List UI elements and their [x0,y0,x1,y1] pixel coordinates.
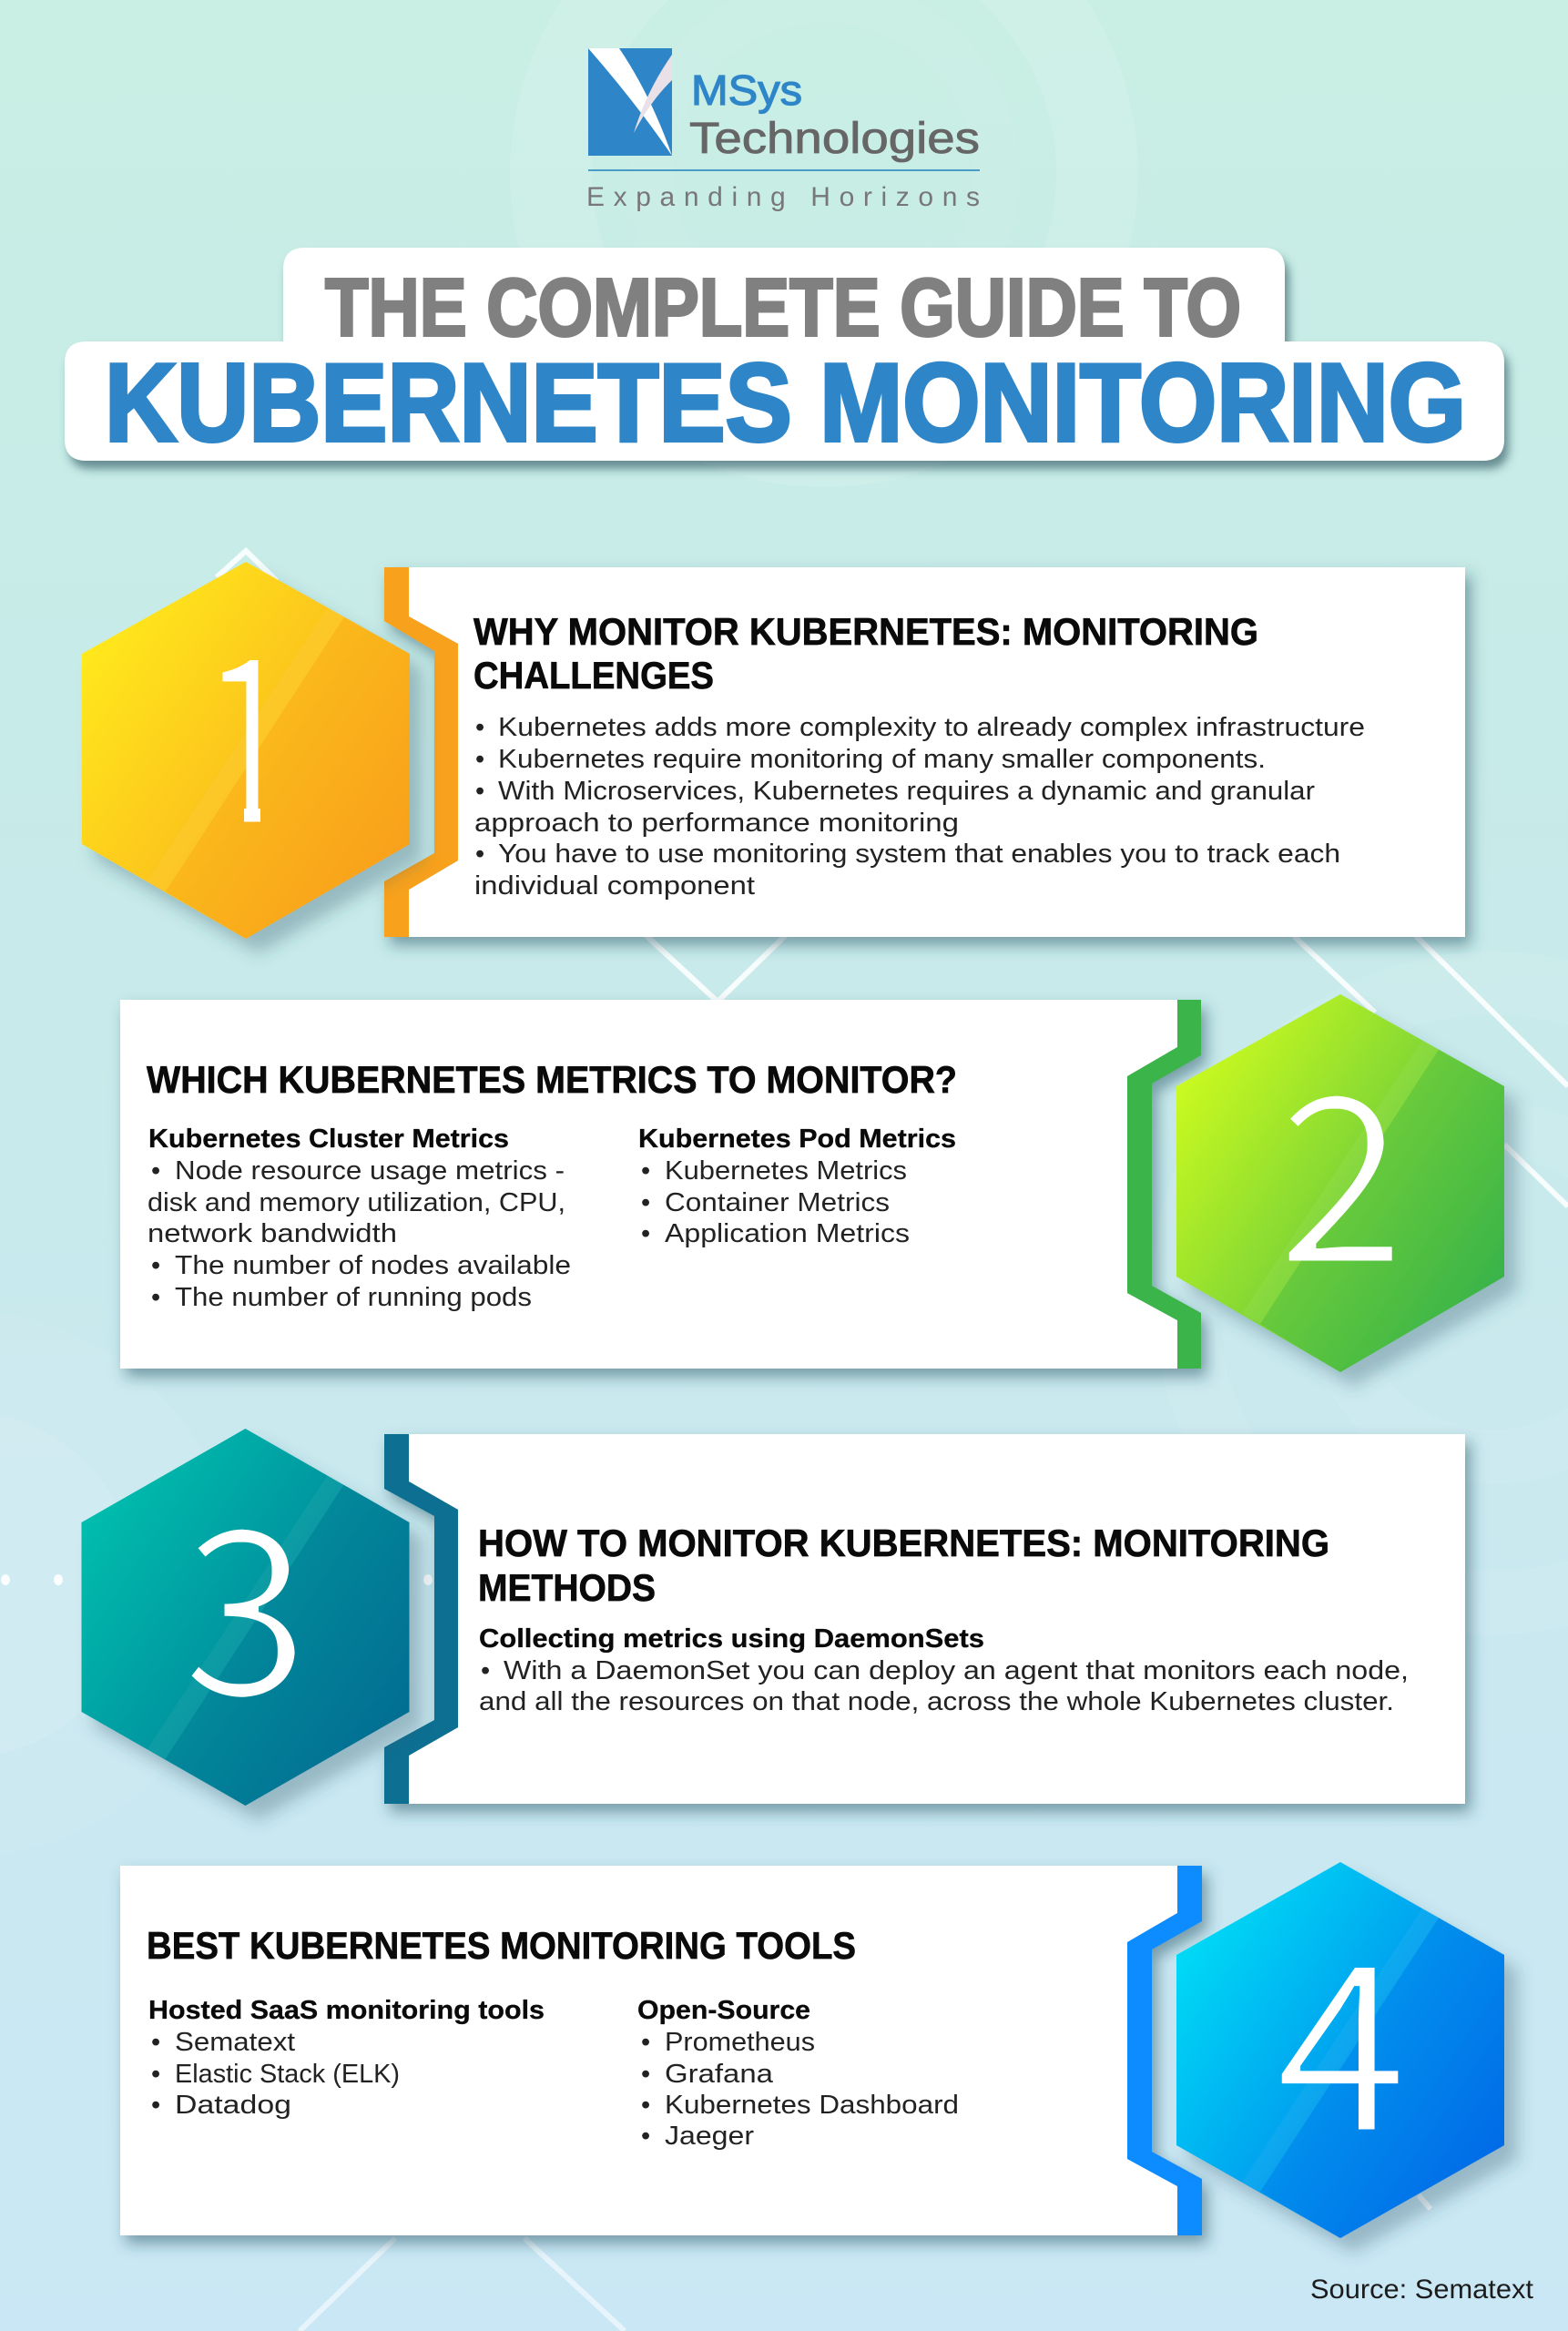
open-source column: • [641,2060,650,2089]
panel 2: which metrics [120,992,1504,1372]
panel 1: why monitor [82,554,1465,939]
hexagon 4 [1176,1861,1504,2238]
hosted SaaS column: Hosted SaaS monitoring tools [148,1996,545,2025]
panel 1 heading: CHALLENGES [473,654,714,697]
panel 1 bullet list: Kubernetes require monitoring of many smaller components. [498,745,1266,774]
hosted SaaS column [148,1996,545,2120]
pod metrics column: Application Metrics [665,1219,910,1248]
cluster metrics column: • [151,1156,160,1186]
cluster metrics column: • [151,1283,160,1312]
panel 3 heading: METHODS [478,1566,656,1609]
open-source column: Kubernetes Dashboard [665,2091,959,2120]
hexagon 4: 4 [1275,1861,1408,2199]
hexagon 2: 2 [1277,992,1406,1330]
panel 4: best tools [120,1861,1504,2238]
panel 3: how to monitor [82,1426,1465,1806]
panel 2 heading: WHICH KUBERNETES METRICS TO MONITOR? [147,1058,957,1101]
pod metrics column: Kubernetes Pod Metrics [638,1125,956,1154]
logo tagline: Expanding Horizons [586,182,980,212]
open-source column: • [641,2091,650,2120]
DaemonSets description: • [481,1656,490,1685]
title banner [65,248,1504,464]
open-source column: Prometheus [665,2028,815,2057]
hexagon 3: 3 [180,1426,310,1764]
title line 1: THE COMPLETE GUIDE TO [325,262,1241,353]
panel 1 bullet list: • [475,713,484,742]
hosted SaaS column: Sematext [175,2028,295,2057]
panel 1 heading [473,610,1258,697]
panel 1 bullet list: approach to performance monitoring [474,809,959,838]
panel 1 bullet list: individual component [474,871,755,901]
hosted SaaS column: • [151,2060,160,2089]
DaemonSets description: With a DaemonSet you can deploy an agent that monitors each node, [504,1656,1409,1685]
panel 1 bullet list: You have to use monitoring system that enables you to track each [498,840,1340,869]
open-source column: Grafana [665,2060,774,2089]
cluster metrics column: Node resource usage metrics - [175,1156,565,1186]
panel 1 bullet list: • [475,745,484,774]
panel 3 heading [478,1522,1329,1609]
panel 1 bullet list: Kubernetes adds more complexity to already complex infrastructure [498,713,1365,742]
panel 1 bullet list [474,713,1365,901]
cluster metrics column: The number of nodes available [175,1251,571,1280]
cluster metrics column: network bandwidth [148,1219,397,1248]
pod metrics column: Kubernetes Metrics [665,1156,907,1186]
cluster metrics column [148,1125,571,1312]
panel 1 bullet list: • [475,840,484,869]
cluster metrics column: • [151,1251,160,1280]
hexagon 3 [82,1426,410,1806]
hexagon 1 [82,554,410,939]
cluster metrics column: The number of running pods [175,1283,532,1312]
panel 1 bullet list: With Microservices, Kubernetes requires a dynamic and granular [498,777,1315,806]
pod metrics column: • [641,1219,650,1248]
open-source column: • [641,2028,650,2057]
pod metrics column: Container Metrics [665,1188,890,1217]
hosted SaaS column: Elastic Stack (ELK) [175,2060,400,2089]
hosted SaaS column: • [151,2091,160,2120]
hosted SaaS column: Datadog [175,2091,291,2120]
icon: MSys logo mark [588,48,672,156]
open-source column: Open-Source [637,1996,810,2025]
logo [586,48,980,212]
DaemonSets description [479,1656,1409,1716]
open-source column: • [641,2122,650,2151]
logo wordmark MSys: MSys [691,66,802,114]
hosted SaaS column: • [151,2028,160,2057]
cluster metrics column: Kubernetes Cluster Metrics [148,1125,509,1154]
DaemonSets description: and all the resources on that node, across the whole Kubernetes cluster. [479,1687,1394,1716]
hexagon 2 [1176,992,1504,1372]
cluster metrics column: disk and memory utilization, CPU, [148,1188,565,1217]
pod metrics column: • [641,1156,650,1186]
panel 4 heading: BEST KUBERNETES MONITORING TOOLS [147,1924,856,1967]
panel 3 heading: HOW TO MONITOR KUBERNETES: MONITORING [478,1522,1329,1564]
pod metrics column: • [641,1188,650,1217]
DaemonSets subheading: Collecting metrics using DaemonSets [479,1624,984,1654]
hexagon 1: 1 [199,554,299,891]
source credit: Source: Sematext [1310,2275,1534,2305]
open-source column [637,1996,959,2151]
open-source column: Jaeger [665,2122,754,2151]
panel 1 heading: WHY MONITOR KUBERNETES: MONITORING [473,610,1258,653]
panel 1 bullet list: • [475,777,484,806]
pod metrics column [638,1125,956,1248]
logo wordmark Technologies: Technologies [689,115,980,163]
